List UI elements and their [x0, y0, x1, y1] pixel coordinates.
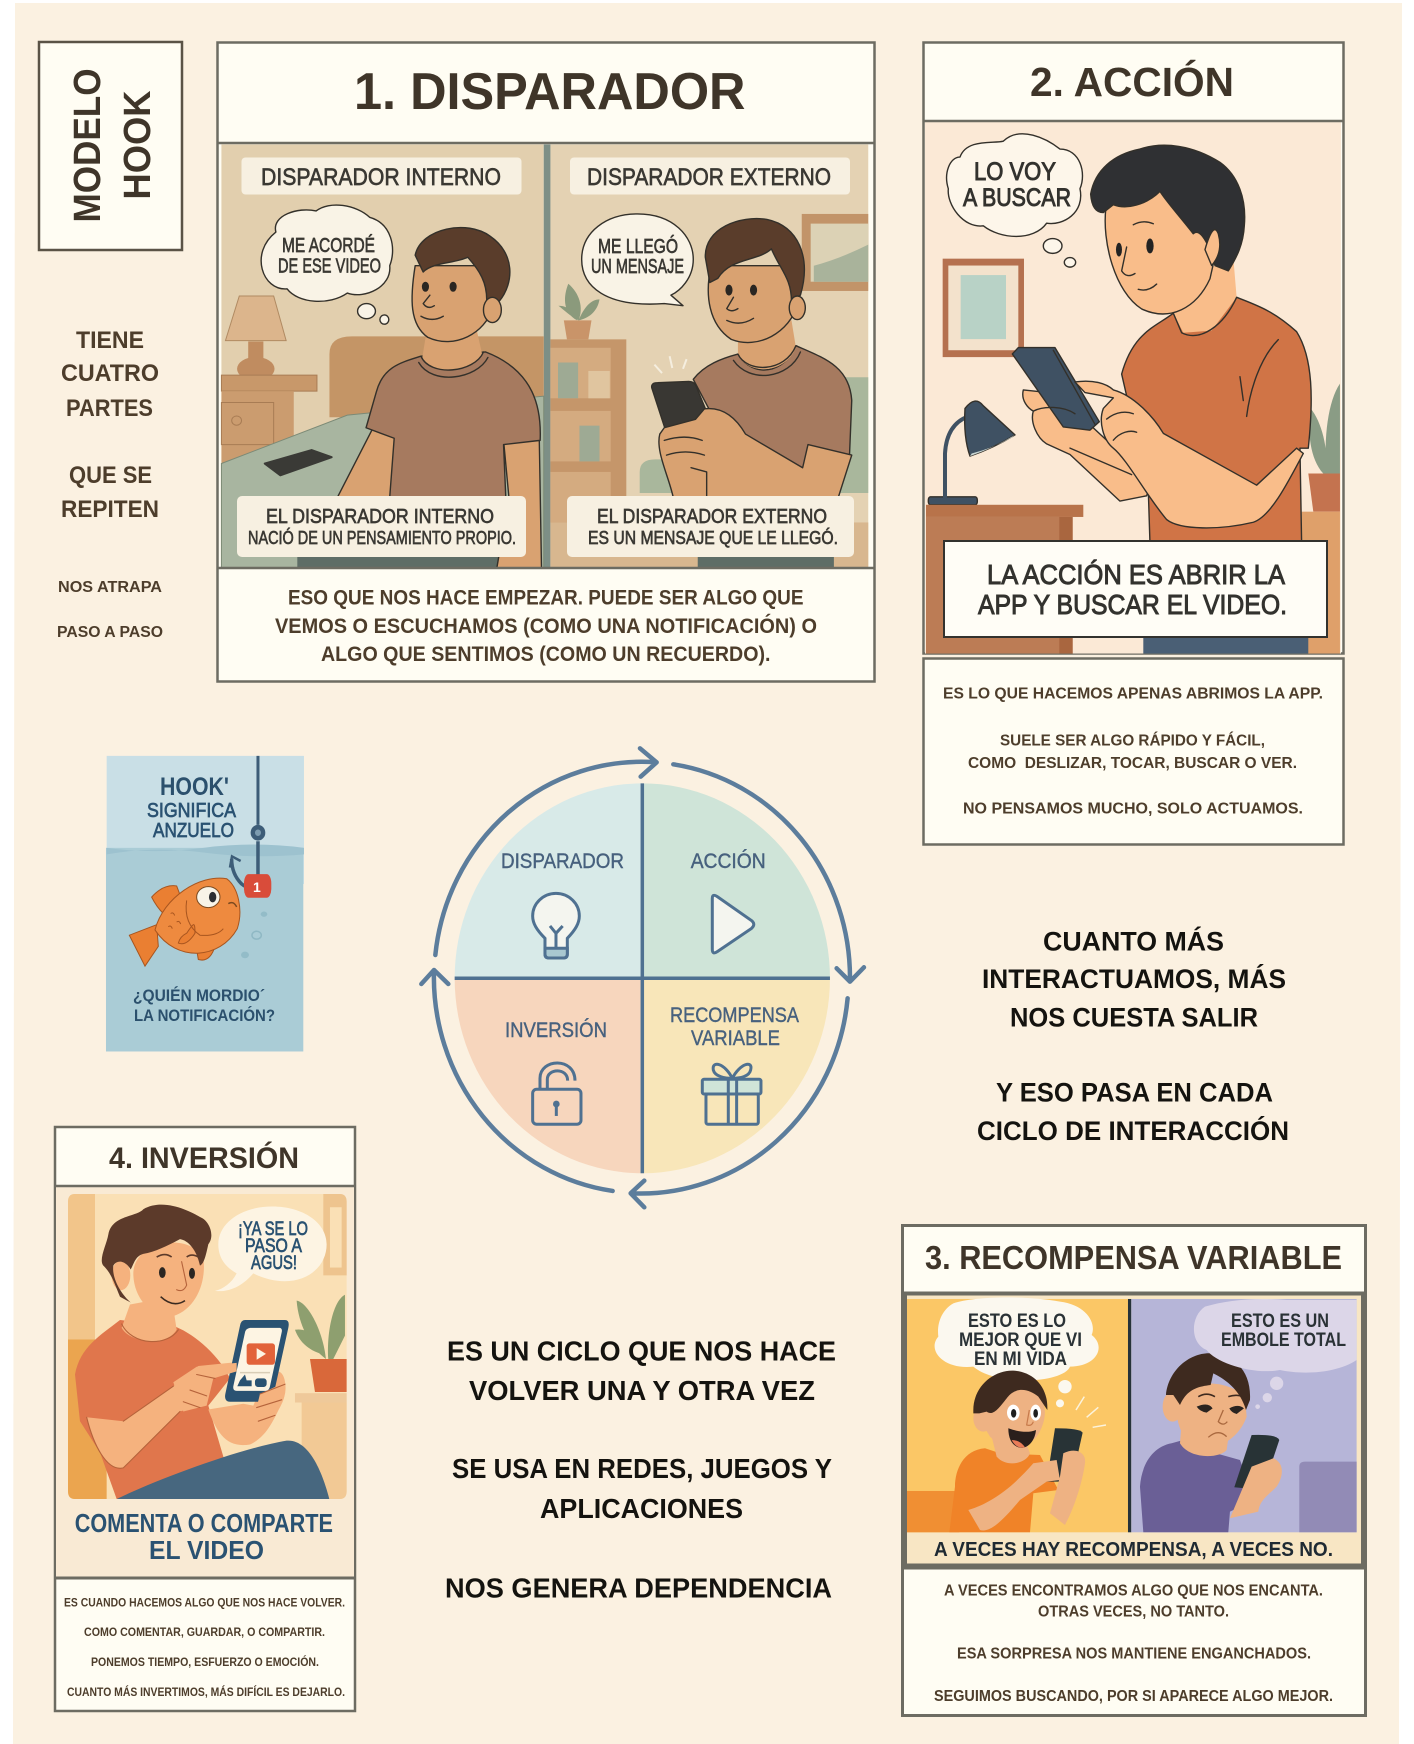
quadrant: accion — [642, 783, 830, 978]
quadrant: inversion — [455, 978, 642, 1173]
question text — [133, 986, 275, 1025]
description text: VEMOS O ESCUCHAMOS (COMO UNA NOTIFICACIÓN) O — [275, 614, 817, 638]
caption: EL VIDEO — [149, 1535, 264, 1565]
heading: 4 inversion: 4. INVERSIÓN — [109, 1141, 299, 1175]
description box: ES LO QUE HACEMOS APENAS ABRIMOS LA APP. — [943, 686, 1323, 702]
right bubble text: ESTO ES UN — [1231, 1311, 1329, 1332]
caption — [75, 1508, 333, 1565]
right bubble text — [1221, 1311, 1346, 1351]
description text: ESA SORPRESA NOS MANTIENE ENGANCHADOS. — [957, 1646, 1311, 1662]
thought bubble text: ME ACORDÉ — [282, 234, 375, 257]
right text block: NOS CUESTA SALIR — [1010, 1003, 1258, 1033]
icon: gift — [702, 1064, 761, 1124]
bubble text — [238, 1219, 308, 1274]
left bubble text: EN MI VIDA — [974, 1349, 1067, 1370]
icon: open padlock — [533, 1063, 581, 1124]
question text: LA NOTIFICACIÓN? — [134, 1006, 275, 1025]
heading: 1 disparador: 1. DISPARADOR — [354, 63, 746, 121]
right text block: Y ESO PASA EN CADA — [996, 1078, 1273, 1108]
caption: COMENTA O COMPARTE — [75, 1508, 333, 1538]
description text: A VECES ENCONTRAMOS ALGO QUE NOS ENCANTA. — [944, 1582, 1323, 1600]
description text — [934, 1582, 1333, 1705]
caption: la accion: LA ACCIÓN ES ABRIR LA — [987, 559, 1285, 590]
description text: CUANTO MÁS INVERTIMOS, MÁS DIFÍCIL ES DEJARLO. — [67, 1686, 345, 1699]
caption strip text: A VECES HAY RECOMPENSA, A VECES NO. — [934, 1539, 1333, 1561]
hook heading text: ANZUELO — [153, 820, 234, 842]
arrow: accion to recompensa — [673, 764, 864, 982]
bubble text: lo voy a buscar — [963, 158, 1071, 212]
panel: 3 recompensa variable — [902, 1226, 1366, 1716]
panel: 1 disparador — [217, 42, 875, 682]
description text: COMO COMENTAR, GUARDAR, O COMPARTIR. — [84, 1627, 325, 1639]
center bottom text block: VOLVER UNA Y OTRA VEZ — [469, 1375, 815, 1406]
card: hook significa anzuelo — [106, 756, 304, 1051]
left intro text: REPITEN — [61, 496, 159, 523]
caption: externo: ES UN MENSAJE QUE LE LLEGÓ. — [588, 527, 838, 548]
badge number: 1 — [253, 879, 261, 895]
quadrant labels: DISPARADOR — [501, 850, 624, 873]
illustration: happy and bored — [906, 1297, 1357, 1532]
bubble text: AGUS! — [251, 1253, 297, 1274]
description box: SUELE SER ALGO RÁPIDO Y FÁCIL, — [1000, 730, 1265, 750]
caption: interno: EL DISPARADOR INTERNO — [266, 506, 494, 528]
quadrant: recompensa variable — [642, 978, 830, 1173]
caption: interno — [237, 496, 526, 557]
illustration: person sharing video — [68, 1194, 347, 1499]
title box: modelo hook — [39, 42, 182, 250]
left intro text: PARTES — [66, 395, 153, 422]
illustration: person with phone — [925, 121, 1341, 654]
question text: ¿QUIÉN MORDIO´ — [133, 986, 265, 1005]
left intro text — [57, 327, 163, 641]
hook heading text: HOOK' — [160, 773, 229, 801]
hook heading text: SIGNIFICA — [147, 800, 237, 822]
icon: light bulb — [533, 893, 579, 958]
label: disparador interno: DISPARADOR INTERNO — [261, 164, 501, 191]
caption: externo: EL DISPARADOR EXTERNO — [597, 506, 827, 528]
quadrant labels — [501, 850, 799, 1050]
speech bubble text — [591, 235, 684, 278]
bubble text: ¡YA SE LO — [238, 1219, 308, 1240]
arrow: inversion to disparador — [421, 970, 613, 1191]
left intro text: NOS ATRAPA — [58, 579, 162, 596]
center bottom text block — [445, 1336, 836, 1604]
speech bubble text: UN MENSAJE — [591, 256, 684, 278]
description text: PONEMOS TIEMPO, ESFUERZO O EMOCIÓN. — [91, 1656, 319, 1669]
description text: ESO QUE NOS HACE EMPEZAR. PUEDE SER ALGO QUE — [288, 586, 804, 610]
right text block — [977, 926, 1289, 1146]
title box: modelo hook: MODELO — [67, 68, 109, 222]
quadrant labels: ACCIÓN — [691, 850, 766, 873]
icon: play — [712, 895, 754, 953]
arrow: disparador to accion — [435, 748, 657, 955]
description box — [924, 658, 1344, 844]
thought bubble text — [278, 234, 381, 278]
left bubble text — [959, 1311, 1082, 1370]
caption: la accion: APP Y BUSCAR EL VIDEO. — [978, 589, 1287, 620]
bubble text: PASO A — [245, 1236, 302, 1257]
caption: la accion — [944, 541, 1327, 637]
quadrants and arrows — [421, 748, 864, 1207]
quadrant labels: INVERSIÓN — [505, 1019, 607, 1042]
description text — [275, 586, 817, 666]
arrow: recompensa to inversion — [631, 998, 848, 1207]
quadrant labels: RECOMPENSA — [670, 1004, 799, 1027]
illustration: disparador interno and externo — [221, 144, 868, 568]
quadrant labels: VARIABLE — [691, 1027, 780, 1050]
left bubble text: ESTO ES LO — [968, 1311, 1066, 1332]
caption: externo — [567, 496, 854, 557]
heading: 2 accion: 2. ACCIÓN — [1030, 59, 1234, 105]
thought bubble text: DE ESE VIDEO — [278, 256, 381, 278]
center bottom text block: ES UN CICLO QUE NOS HACE — [447, 1336, 836, 1367]
heading: 3 recompensa variable: 3. RECOMPENSA VARIABLE — [925, 1239, 1342, 1276]
left intro text: CUATRO — [61, 360, 159, 387]
description box: COMO DESLIZAR, TOCAR, BUSCAR O VER. — [968, 755, 1297, 772]
center bottom text block: NOS GENERA DEPENDENCIA — [445, 1573, 832, 1604]
right text block: INTERACTUAMOS, MÁS — [982, 963, 1286, 994]
left bubble text: MEJOR QUE VI — [959, 1330, 1082, 1351]
bubble text: lo voy a buscar: LO VOY — [974, 158, 1056, 186]
description text: ALGO QUE SENTIMOS (COMO UN RECUERDO). — [321, 643, 770, 666]
speech bubble text: ME LLEGÓ — [598, 235, 678, 258]
caption: interno: NACIÓ DE UN PENSAMIENTO PROPIO. — [248, 527, 516, 548]
description text: ES CUANDO HACEMOS ALGO QUE NOS HACE VOLVER. — [64, 1598, 345, 1610]
center bottom text block: SE USA EN REDES, JUEGOS Y — [452, 1453, 832, 1484]
left intro text: PASO A PASO — [57, 624, 163, 641]
label: disparador externo — [570, 158, 850, 194]
right bubble text: EMBOLE TOTAL — [1221, 1330, 1346, 1351]
left intro text: TIENE — [76, 327, 144, 354]
description text: SEGUIMOS BUSCANDO, POR SI APARECE ALGO MEJOR. — [934, 1688, 1333, 1705]
description text: OTRAS VECES, NO TANTO. — [1038, 1604, 1229, 1620]
description text — [64, 1598, 345, 1699]
fish and hook illustration — [106, 756, 304, 1051]
right text block: CUANTO MÁS — [1043, 926, 1224, 957]
center bottom text block: APLICACIONES — [540, 1493, 743, 1524]
cycle diagram — [421, 748, 864, 1207]
description box: NO PENSAMOS MUCHO, SOLO ACTUAMOS. — [963, 800, 1303, 818]
left intro text: QUE SE — [69, 462, 152, 489]
label: disparador externo: DISPARADOR EXTERNO — [587, 164, 831, 191]
panel: 4 inversion — [55, 1127, 355, 1711]
label: disparador interno — [242, 158, 522, 194]
hook heading text — [147, 773, 237, 842]
bubble text: lo voy a buscar: A BUSCAR — [963, 184, 1071, 212]
title box: modelo hook: HOOK — [117, 90, 159, 200]
panel: 2 accion — [923, 42, 1344, 844]
quadrant: disparador — [455, 783, 642, 978]
right text block: CICLO DE INTERACCIÓN — [977, 1115, 1289, 1146]
